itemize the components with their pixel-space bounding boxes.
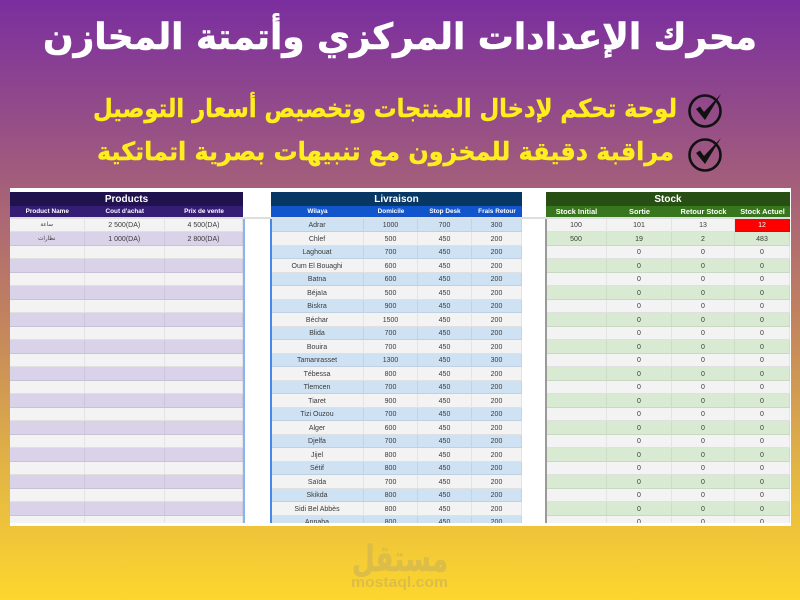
livraison rows: 800 [385, 492, 396, 499]
stock rows: 0 [637, 411, 641, 418]
livraison rows: 200 [491, 236, 502, 242]
livraison rows: 800 [385, 465, 396, 472]
livraison rows: 700 [439, 222, 450, 229]
livraison column headers [271, 206, 522, 217]
livraison title [271, 192, 522, 206]
livraison rows: Tiaret [308, 398, 326, 404]
stock column headers: Stock Initial [556, 207, 597, 216]
stock rows: 500 [570, 236, 582, 242]
stock rows: 0 [701, 478, 705, 486]
stock column headers: Stock Actuel [740, 207, 785, 216]
livraison rows: Batna [308, 276, 326, 283]
stock rows: 0 [760, 424, 764, 432]
stock rows: 0 [760, 316, 764, 324]
panel: stock [546, 192, 790, 523]
stock rows: 0 [637, 303, 641, 310]
spreadsheet panel [10, 188, 791, 526]
livraison rows: 700 [385, 384, 396, 391]
stock rows [547, 219, 790, 523]
products column headers: Cout d'achat [106, 208, 144, 215]
stock rows: 0 [701, 276, 705, 283]
stock rows: 0 [760, 384, 764, 391]
products title [10, 192, 243, 206]
livraison rows: 600 [385, 276, 396, 283]
livraison rows: Adrar [308, 222, 326, 229]
stock rows: 0 [637, 452, 641, 458]
livraison rows: 700 [385, 330, 396, 337]
livraison rows: 700 [385, 411, 396, 418]
stock rows: 0 [760, 303, 764, 310]
stock rows: 0 [760, 262, 764, 270]
stock rows: 0 [760, 478, 764, 486]
livraison rows: 800 [385, 370, 396, 378]
livraison rows: 450 [439, 478, 450, 486]
selection line [270, 218, 272, 522]
livraison rows: 200 [491, 262, 502, 270]
stock rows: 0 [637, 330, 641, 337]
livraison rows: Tlemcen [304, 384, 330, 391]
livraison rows: 450 [439, 236, 450, 242]
stock rows: 0 [701, 303, 705, 310]
livraison rows: 450 [439, 452, 450, 458]
livraison rows: 500 [385, 236, 396, 242]
stock rows: 0 [760, 249, 764, 256]
stock rows: 0 [701, 424, 705, 432]
stock rows: 0 [760, 276, 764, 283]
stock rows: 0 [760, 370, 764, 378]
livraison rows: 200 [491, 398, 502, 404]
stock rows: 100 [570, 222, 582, 229]
livraison rows: 450 [439, 370, 450, 378]
livraison rows: 450 [439, 411, 450, 418]
livraison column headers: Stop Desk [429, 208, 461, 215]
stock rows: 0 [637, 424, 641, 432]
livraison rows: 900 [385, 303, 396, 310]
livraison rows: 200 [491, 478, 502, 486]
livraison rows: 800 [385, 506, 396, 512]
livraison rows: 450 [439, 316, 450, 324]
stock rows: 0 [637, 357, 641, 364]
stock rows: 0 [701, 411, 705, 418]
products rows: نظارات [38, 236, 55, 242]
stock rows: 0 [701, 384, 705, 391]
livraison rows: Skikda [306, 492, 328, 499]
stock rows: 0 [701, 370, 705, 378]
livraison rows: 200 [491, 506, 502, 512]
products column headers: Prix de vente [184, 208, 224, 215]
stock rows: 483 [756, 236, 768, 242]
stock rows: 0 [701, 438, 705, 445]
livraison rows: Sétif [310, 465, 324, 472]
livraison rows: Bouira [307, 344, 327, 350]
products column headers [10, 206, 243, 217]
livraison rows: 700 [385, 438, 396, 445]
livraison rows: 1500 [383, 316, 398, 324]
stock rows: 0 [760, 411, 764, 418]
livraison rows: Tébessa [304, 370, 330, 378]
feature line: stock monitoring: مراقبة دقيقة للمخزون مع تنبيهات بصرية اتماتكية [97, 137, 674, 167]
stock rows: 0 [701, 290, 705, 296]
stock rows: 0 [760, 344, 764, 350]
stock rows: 0 [637, 249, 641, 256]
stock rows: 0 [760, 330, 764, 337]
livraison rows: 200 [491, 465, 502, 472]
stock rows: 0 [760, 492, 764, 499]
livraison rows: Biskra [307, 303, 327, 310]
livraison rows: 450 [439, 303, 450, 310]
livraison rows: 300 [491, 222, 502, 229]
livraison rows: Sidi Bel Abbès [294, 506, 340, 512]
products rows: ساعة [40, 222, 53, 228]
livraison rows: 200 [491, 424, 502, 432]
stock rows: 0 [637, 398, 641, 404]
stock rows: 0 [637, 370, 641, 378]
products column headers: Product Name [26, 208, 69, 215]
stock rows: 0 [760, 398, 764, 404]
stock rows: 0 [760, 357, 764, 364]
livraison rows: 450 [439, 492, 450, 499]
stock rows: 0 [701, 357, 705, 364]
stock title: Stock [654, 194, 682, 204]
livraison rows: 800 [385, 452, 396, 458]
livraison rows: 900 [385, 398, 396, 404]
title: محرك الإعدادات المركزي وأتمتة المخازن [43, 13, 757, 58]
stock rows: 0 [701, 506, 705, 512]
products rows: 1 000(DA) [108, 236, 140, 242]
livraison rows: Blida [309, 330, 325, 337]
stock rows: 101 [633, 222, 645, 229]
livraison rows: 450 [439, 506, 450, 512]
livraison rows: 700 [385, 344, 396, 350]
stock column headers: Sortie [629, 207, 650, 216]
stock rows: 0 [701, 262, 705, 270]
stock rows: 0 [701, 492, 705, 499]
stock rows: 19 [635, 236, 643, 242]
livraison rows: 450 [439, 357, 450, 364]
livraison rows: 200 [491, 492, 502, 499]
livraison rows: 450 [439, 384, 450, 391]
products rows: 4 500(DA) [188, 222, 219, 229]
stock rows: 0 [760, 452, 764, 458]
livraison rows: 450 [439, 276, 450, 283]
livraison rows: 200 [491, 344, 502, 350]
livraison rows: 1000 [383, 222, 398, 229]
livraison rows: 500 [385, 290, 396, 296]
livraison rows: Oum El Bouaghi [292, 262, 342, 270]
livraison column headers: Wilaya [307, 208, 328, 215]
products rows: 2 500(DA) [108, 222, 140, 229]
stock rows: 0 [701, 452, 705, 458]
stock rows: 13 [699, 222, 707, 229]
livraison rows: Tamanrasset [297, 357, 337, 364]
stock rows: 0 [701, 316, 705, 324]
livraison column headers: Domicile [378, 208, 404, 215]
stock rows: 0 [637, 344, 641, 350]
livraison rows: 450 [439, 262, 450, 270]
stock rows: 0 [701, 249, 705, 256]
stock rows: 0 [760, 438, 764, 445]
livraison rows: Laghouat [302, 249, 332, 256]
livraison rows: 300 [491, 357, 502, 364]
stock rows: 0 [637, 384, 641, 391]
stock rows: 0 [701, 344, 705, 350]
livraison rows: Béjaïa [307, 290, 327, 296]
livraison rows [272, 219, 522, 523]
livraison rows: 450 [439, 424, 450, 432]
livraison rows: 450 [439, 465, 450, 472]
stock rows: 0 [637, 276, 641, 283]
stock rows: 0 [637, 492, 641, 499]
livraison rows: 450 [439, 290, 450, 296]
stock rows: 0 [760, 506, 764, 512]
selection line [243, 218, 245, 522]
livraison rows: 450 [439, 398, 450, 404]
icon: check mark 1 [688, 94, 722, 128]
icon: check mark 2 [688, 138, 722, 172]
products rows [10, 219, 243, 523]
stock column headers [546, 206, 790, 217]
livraison rows: Tizi Ouzou [300, 411, 334, 418]
stock rows: 0 [637, 262, 641, 270]
products title: Products [105, 194, 148, 204]
livraison rows: Jijel [311, 452, 323, 458]
livraison rows: 200 [491, 438, 502, 445]
stock rows: 0 [701, 398, 705, 404]
livraison rows: 200 [491, 276, 502, 283]
livraison rows: 700 [385, 478, 396, 486]
livraison title: Livraison [374, 194, 419, 204]
livraison rows: 200 [491, 290, 502, 296]
livraison rows: 1300 [383, 357, 398, 364]
livraison rows: 450 [439, 330, 450, 337]
panel: products [10, 192, 243, 523]
stock rows: 0 [760, 465, 764, 472]
livraison rows: 450 [439, 344, 450, 350]
stock rows: 0 [637, 316, 641, 324]
livraison rows: Alger [309, 424, 325, 432]
livraison rows: 200 [491, 316, 502, 324]
stock rows: 0 [637, 506, 641, 512]
products rows: 2 800(DA) [188, 236, 219, 242]
stock rows: 2 [701, 236, 705, 242]
stock rows: 0 [701, 330, 705, 337]
livraison rows: Béchar [306, 316, 328, 324]
stock column headers: Retour Stock [680, 207, 726, 216]
livraison rows: 200 [491, 452, 502, 458]
livraison rows: 450 [439, 249, 450, 256]
livraison rows: Djelfa [308, 438, 326, 445]
stock rows: 0 [760, 290, 764, 296]
livraison rows: 200 [491, 303, 502, 310]
panel: livraison [271, 192, 522, 523]
stock rows: 0 [701, 465, 705, 472]
watermark: mostaql.com [351, 574, 448, 591]
livraison rows: Chlef [309, 236, 325, 242]
livraison rows: 700 [385, 249, 396, 256]
stock title [546, 192, 790, 206]
livraison rows: Saïda [308, 478, 326, 486]
livraison rows: 200 [491, 384, 502, 391]
livraison rows: 450 [439, 438, 450, 445]
livraison rows: 200 [491, 249, 502, 256]
stock rows: 12 [758, 222, 766, 229]
livraison rows: 200 [491, 411, 502, 418]
stock rows: 0 [637, 465, 641, 472]
stock rows: 0 [637, 438, 641, 445]
livraison rows: 200 [491, 330, 502, 337]
livraison rows: 600 [385, 424, 396, 432]
stock rows: 0 [637, 478, 641, 486]
livraison rows: 600 [385, 262, 396, 270]
livraison rows: 200 [491, 370, 502, 378]
livraison column headers: Frais Retour [478, 208, 516, 215]
stock rows: 0 [637, 290, 641, 296]
selection line [545, 218, 546, 522]
